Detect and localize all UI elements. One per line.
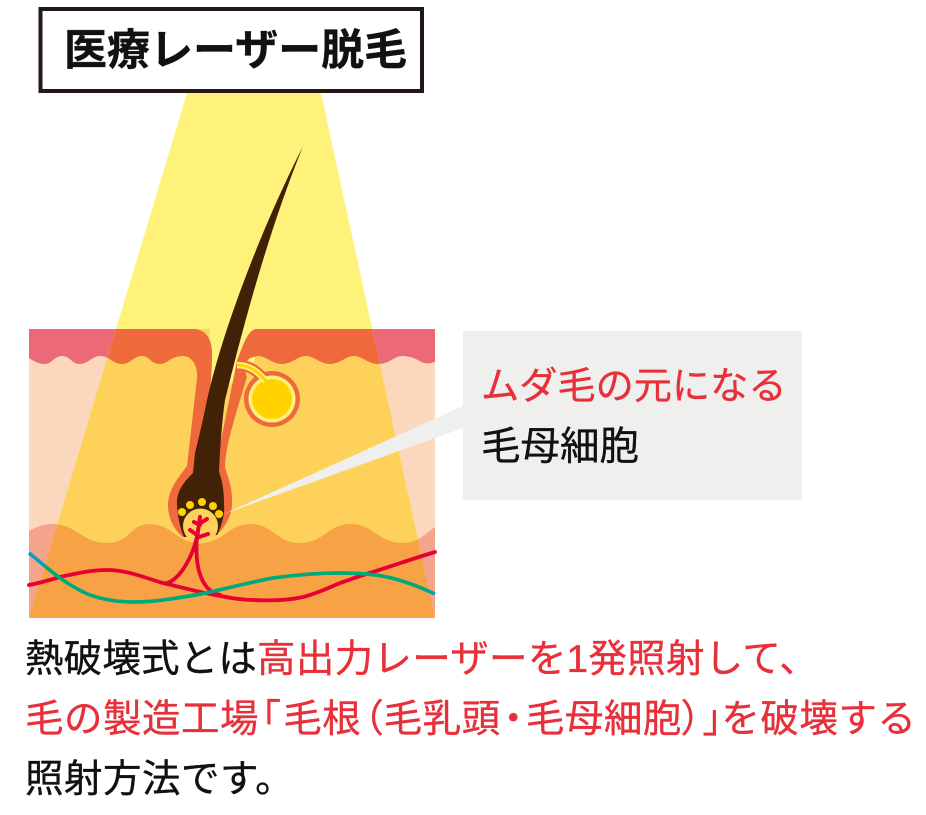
dermal papilla [183, 508, 218, 544]
body text [25, 638, 916, 801]
callout line 1: ムダ毛の元になる [481, 365, 786, 408]
callout line 2: 毛母細胞 [481, 425, 639, 469]
body line 2: 毛の製造工場「毛根（毛乳頭・毛母細胞）」を破壊する [25, 698, 916, 741]
nerve line ends [29, 553, 435, 602]
body line 3: 照射方法です。 [25, 758, 294, 801]
title: 医療レーザー脱毛 [64, 26, 407, 74]
hair shaft and bulb [177, 147, 303, 537]
illustration: skin, hair and laser beam [27, 7, 802, 618]
hair matrix cells [178, 498, 223, 518]
sebaceous gland [237, 365, 300, 427]
laser beam [29, 93, 435, 618]
body line 1: 熱破壊式とは高出力レーザーを1発照射して、 [25, 638, 818, 681]
skin outside beam [29, 329, 435, 618]
right follicle sheath [200, 329, 300, 535]
callout pointer [224, 406, 463, 514]
nerve line inside beam [44, 564, 430, 604]
title box [40, 9, 422, 91]
skin inside beam [29, 329, 435, 618]
left follicle sheath [168, 329, 212, 537]
blood vessels [29, 517, 435, 600]
callout text [481, 365, 786, 469]
callout box [463, 331, 802, 500]
